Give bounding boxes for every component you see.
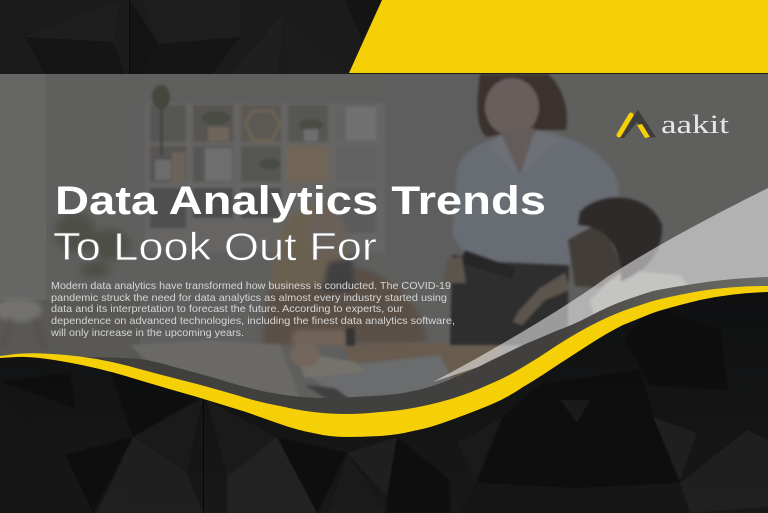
- logo: aakit: [618, 110, 730, 139]
- plant: [55, 212, 130, 278]
- intro paragraph: pandemic struck the need for data analytics as almost every industry started using: [51, 292, 447, 304]
- seated man: [567, 196, 688, 314]
- title: [53, 179, 546, 269]
- bottom dark geometric panel: [0, 290, 768, 513]
- intro paragraph: will only increase in the upcoming years.: [50, 327, 244, 339]
- intro paragraph: data and its interpretation to forecast the future. According to experts, our: [51, 303, 404, 315]
- office photo background: [0, 74, 768, 419]
- grey wave band: [66, 277, 768, 513]
- wordmark: aakit: [661, 110, 730, 139]
- icon: logo mark: [618, 110, 656, 138]
- top dark geometric band: [0, 0, 768, 74]
- white chair: [0, 299, 44, 346]
- title line 2: To Look Out For: [53, 226, 377, 269]
- intro paragraph: [50, 280, 455, 339]
- translucent white swoosh: [433, 188, 768, 382]
- title line 1: Data Analytics Trends: [55, 179, 546, 223]
- intro paragraph: Modern data analytics have transformed how business is conducted. The COVID-19: [51, 280, 451, 292]
- yellow top banner: [349, 0, 768, 73]
- intro paragraph: dependence on advanced technologies, including the finest data analytics software,: [51, 315, 455, 327]
- table, papers and laptop: [132, 327, 499, 398]
- yellow wave band: [0, 286, 768, 513]
- blonde woman seated: [263, 205, 427, 346]
- standing woman: [443, 74, 619, 345]
- bookshelf: [150, 84, 378, 228]
